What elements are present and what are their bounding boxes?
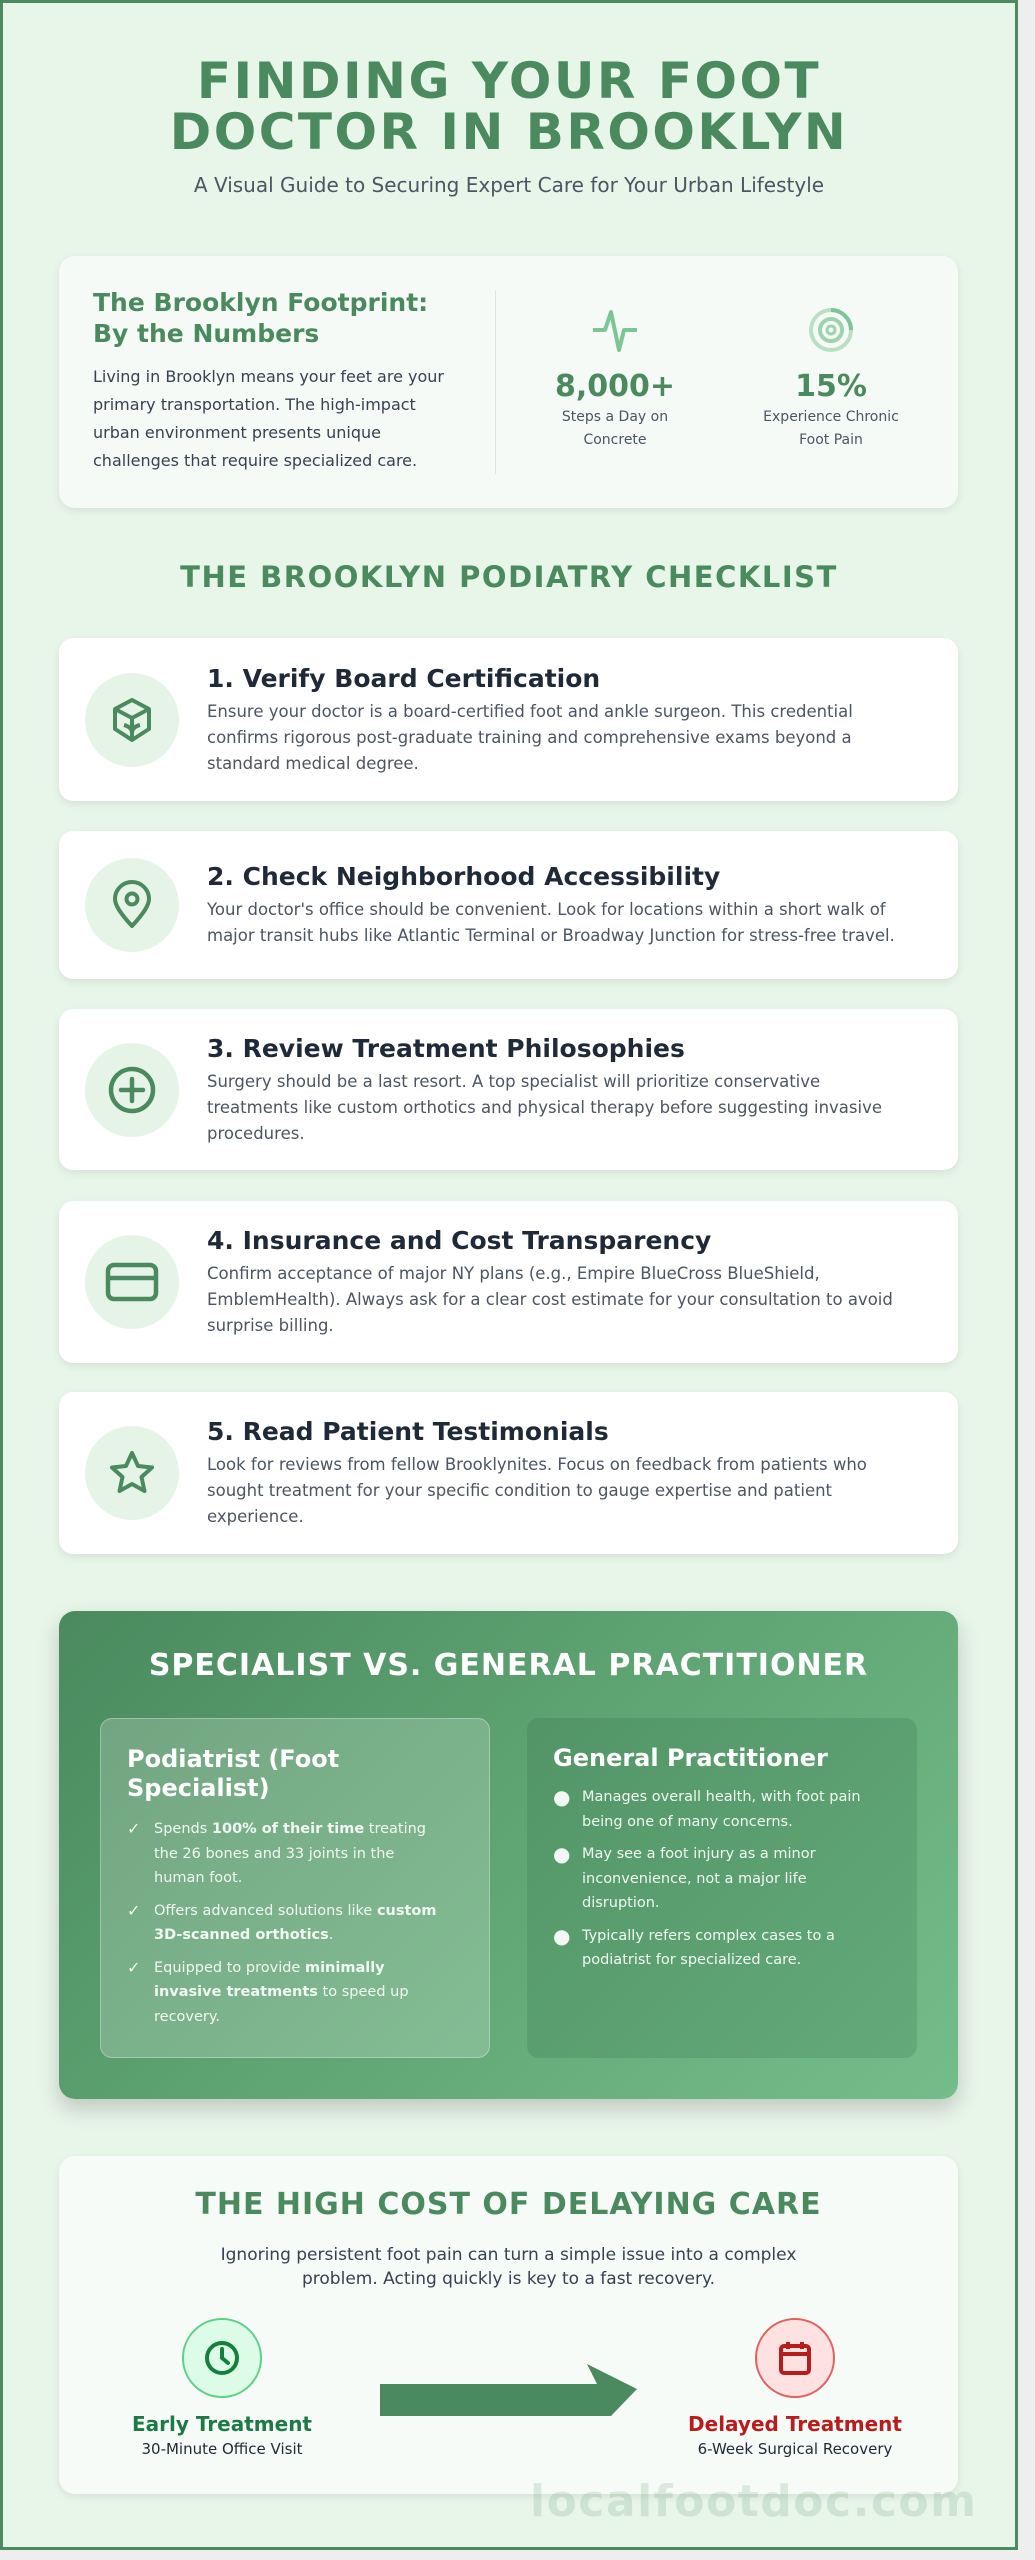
panel: cost of delay bbox=[59, 2156, 958, 2494]
icon: pulse bbox=[593, 310, 637, 352]
icon: credit card bbox=[85, 1235, 179, 1329]
stat: pain: Foot Pain bbox=[799, 432, 863, 448]
icon: certification bbox=[85, 672, 179, 766]
box: podiatrist bbox=[100, 1718, 490, 2058]
title: FINDING YOUR FOOT bbox=[197, 52, 821, 110]
delayed treatment: 6-Week Surgical Recovery bbox=[698, 2440, 892, 2458]
box: podiatrist: Specialist) bbox=[127, 1774, 270, 1802]
box: podiatrist: Spends 100% of their time treating the 26 bones and 33 joints in the human foot. bbox=[154, 1821, 426, 1886]
stat: pain: 15% bbox=[795, 369, 867, 404]
box: general practitioner: Manages overall health, with foot pain being one of many concerns. bbox=[582, 1789, 861, 1830]
title: DOCTOR IN BROOKLYN bbox=[170, 103, 848, 161]
stat: steps: Concrete bbox=[583, 432, 647, 448]
box: general practitioner: ● bbox=[553, 1842, 570, 1866]
box: podiatrist: ✓ bbox=[127, 1819, 140, 1838]
card 2: Your doctor's office should be convenient. Look for locations within a short walk of major transit hubs like Atlantic Terminal or Broadway Junction for stress-free travel. bbox=[207, 900, 895, 945]
box: podiatrist: Podiatrist (Foot bbox=[127, 1745, 339, 1773]
box: general practitioner: ● bbox=[553, 1785, 570, 1809]
box: general practitioner: Typically refers complex cases to a podiatrist for specialized care. bbox=[582, 1928, 835, 1968]
box: podiatrist: ✓ bbox=[127, 1958, 140, 1976]
card 5: Look for reviews from fellow Brooklynites. Focus on feedback from patients who sought treatment for your specific condition to gauge expertise and patient experience. bbox=[207, 1455, 867, 1526]
box: general practitioner: General Practitioner bbox=[553, 1744, 828, 1772]
delay text bbox=[221, 2245, 796, 2289]
card 1 bbox=[59, 638, 958, 801]
panel: stats bbox=[59, 256, 958, 508]
card 2: 2. Check Neighborhood Accessibility bbox=[207, 862, 720, 891]
card 4: Confirm acceptance of major NY plans (e.g., Empire BlueCross BlueShield, EmblemHealth). Always ask for a clear cost estimate for your consultation to avoid surprise billing. bbox=[207, 1264, 893, 1335]
icon: clock bbox=[182, 2318, 262, 2398]
card 1: 1. Verify Board Certification bbox=[207, 664, 600, 692]
box: podiatrist: ✓ bbox=[127, 1900, 140, 1920]
early treatment bbox=[132, 2318, 312, 2458]
box: podiatrist: Equipped to provide minimally invasive treatments to speed up recovery. bbox=[154, 1960, 409, 2024]
box: general practitioner bbox=[527, 1718, 917, 2058]
early treatment: 30-Minute Office Visit bbox=[141, 2440, 302, 2458]
icon: calendar bbox=[755, 2318, 835, 2398]
stat: steps: Steps a Day on bbox=[562, 409, 668, 425]
delay text: Ignoring persistent foot pain can turn a simple issue into a complex bbox=[221, 2245, 796, 2265]
card 3: Surgery should be a last resort. A top specialist will prioritize conservative treatments like custom orthotics and physical therapy before suggesting invasive procedures. bbox=[207, 1072, 882, 1142]
delay text: problem. Acting quickly is key to a fast recovery. bbox=[302, 2269, 715, 2289]
stats paragraph: Living in Brooklyn means your feet are your primary transportation. The high-impact urban environment presents unique challenges that require specialized care. bbox=[93, 367, 444, 470]
icon: star bbox=[85, 1426, 179, 1520]
icon: plus circle bbox=[85, 1042, 179, 1136]
arrow bbox=[380, 2364, 637, 2416]
icon: location pin bbox=[85, 858, 179, 952]
stat: steps bbox=[555, 310, 675, 448]
card 4: 4. Insurance and Cost Transparency bbox=[207, 1226, 711, 1255]
comparison heading: SPECIALIST VS. GENERAL PRACTITIONER bbox=[149, 1648, 868, 1683]
panel: specialist vs GP bbox=[59, 1611, 958, 2099]
icon: target bbox=[809, 308, 853, 352]
stats heading: The Brooklyn Footprint: bbox=[93, 288, 428, 317]
box: podiatrist: Offers advanced solutions like custom 3D-scanned orthotics. bbox=[154, 1902, 437, 1943]
checklist heading: THE BROOKLYN PODIATRY CHECKLIST bbox=[180, 560, 838, 594]
box: general practitioner: May see a foot injury as a minor inconvenience, not a major life disruption. bbox=[582, 1846, 816, 1911]
subtitle: A Visual Guide to Securing Expert Care for Your Urban Lifestyle bbox=[194, 173, 824, 197]
card 1: Ensure your doctor is a board-certified foot and ankle surgeon. This credential confirms rigorous post-graduate training and comprehensive exams beyond a standard medical degree. bbox=[207, 702, 853, 772]
card 4 bbox=[59, 1201, 958, 1363]
box: general practitioner: ● bbox=[553, 1924, 570, 1948]
stats heading: By the Numbers bbox=[93, 319, 319, 348]
card 5: 5. Read Patient Testimonials bbox=[207, 1417, 609, 1446]
card 3 bbox=[59, 1009, 958, 1170]
watermark: localfootdoc.com bbox=[530, 2476, 977, 2527]
card 3: 3. Review Treatment Philosophies bbox=[207, 1034, 685, 1062]
stats heading bbox=[93, 288, 428, 348]
card 5 bbox=[59, 1392, 958, 1554]
delay heading: THE HIGH COST OF DELAYING CARE bbox=[195, 2187, 822, 2222]
early treatment: Early Treatment bbox=[132, 2412, 312, 2436]
delayed treatment bbox=[688, 2318, 902, 2458]
stat: pain: Experience Chronic bbox=[763, 409, 899, 425]
delayed treatment: Delayed Treatment bbox=[688, 2412, 902, 2436]
stat: steps: 8,000+ bbox=[555, 369, 675, 404]
title bbox=[170, 52, 848, 161]
card 2 bbox=[59, 831, 958, 979]
stat: pain bbox=[763, 308, 899, 448]
